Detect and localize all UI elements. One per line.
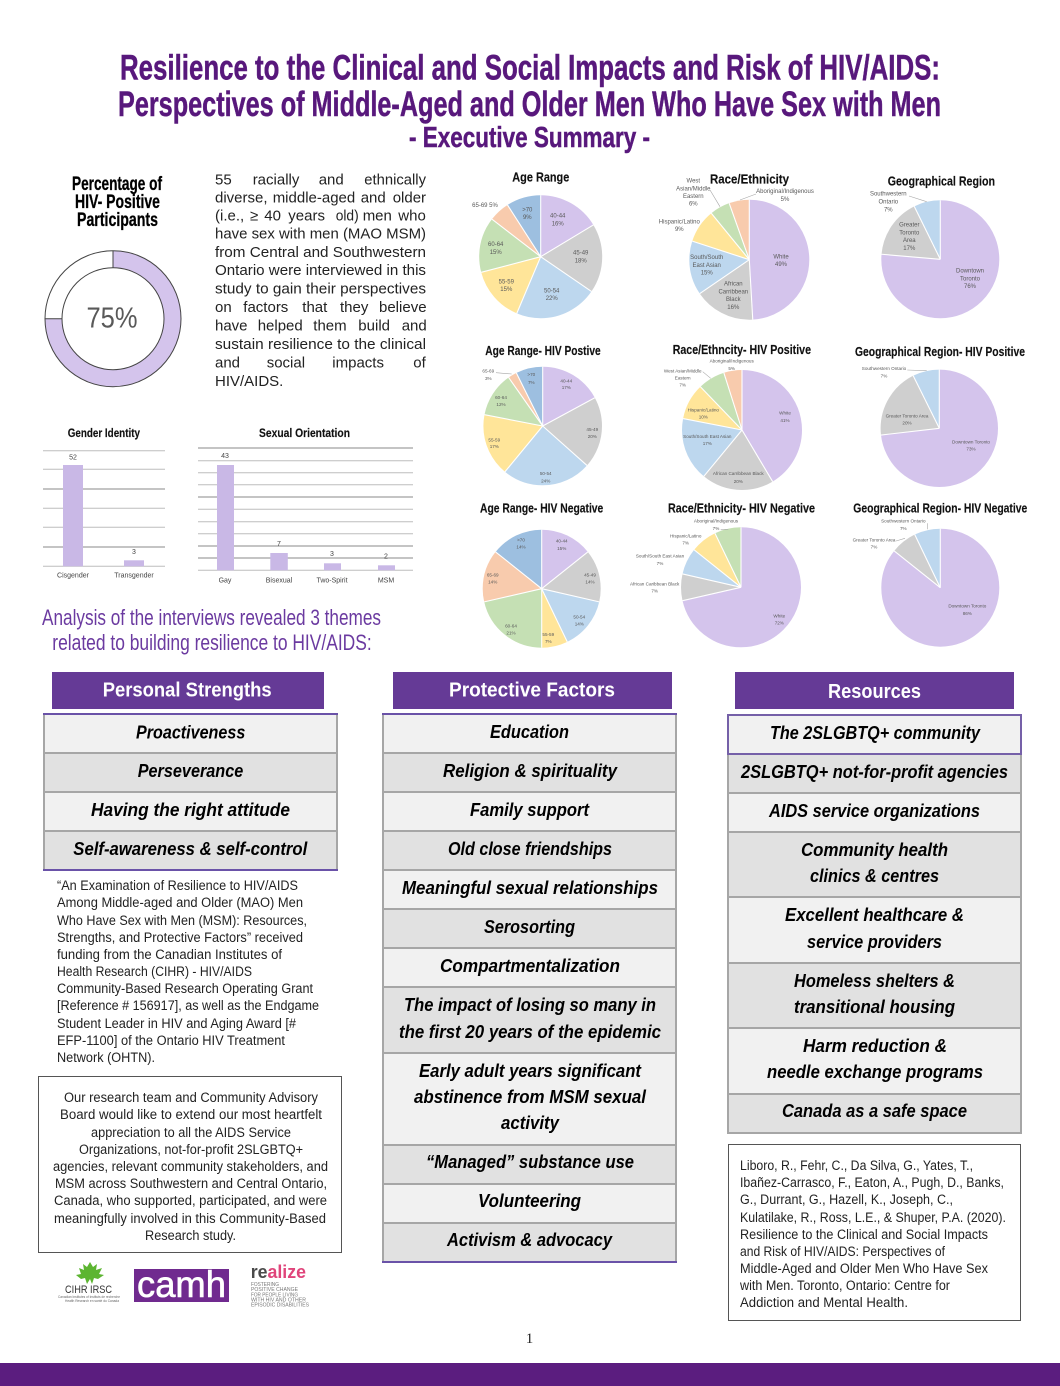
text block: study description: from Central and Southwestern	[215, 244, 426, 261]
row: community health clinics: Community health	[801, 840, 948, 860]
row: self-awareness	[44, 831, 337, 870]
logo: CIHR IRSC	[58, 1262, 120, 1303]
row: managed substance use	[383, 1145, 676, 1184]
row: proactiveness: Proactiveness	[136, 722, 245, 742]
donut chart: 75%	[45, 251, 181, 387]
pie chart: geographical region HIV positive: 73%	[966, 446, 976, 452]
pie chart: age range HIV positive: 7%	[528, 380, 535, 385]
pie chart: age range: 55-59	[499, 279, 515, 285]
row: self-awareness: Self-awareness & self-control	[73, 839, 308, 859]
panel: resources	[728, 672, 1021, 1133]
pie chart: race/ethnicity	[659, 171, 814, 320]
row: early adult years abstinence: abstinence from MSM sexual	[414, 1087, 647, 1107]
callout: acknowledgement box: appreciation to all the AIDS Service	[91, 1125, 291, 1140]
row: meaningful sexual relationships: Meaningful sexual relationships	[402, 878, 658, 898]
text block: citation box: and Risk of HIV/AIDS: Perspectives of	[740, 1244, 945, 1259]
callout: acknowledgement box: Organizations, not-for-profit 2SLGBTQ+	[79, 1142, 303, 1157]
row: compartmentalization: Compartmentalization	[440, 956, 620, 976]
row: family support: Family support	[470, 800, 590, 820]
row: compartmentalization	[383, 948, 676, 987]
pie chart: age range HIV positive: 17%	[562, 385, 571, 390]
row: early adult years abstinence: activity	[501, 1113, 560, 1133]
pie chart: race/ethnicity: Carribbean	[718, 290, 748, 296]
pie chart: age range: 18%	[575, 259, 587, 265]
pie chart: race/ethnicity HIV positive: African Carribbean Black	[713, 471, 764, 476]
text block: study description: and	[402, 318, 427, 335]
footer bar	[0, 1363, 1060, 1386]
pie chart: age range HIV positive: 60-64	[495, 395, 507, 400]
pie chart: age range HIV negative: 7%	[545, 639, 552, 644]
row: activism and advocacy	[383, 1223, 676, 1262]
pie chart: geographical region HIV negative: 86%	[963, 611, 972, 616]
pie chart: age range HIV positive: 65-69	[482, 369, 495, 374]
text block: study description: have sex with men (MAO MSM)	[215, 225, 426, 242]
pie chart: race/ethnicity HIV negative: 7%	[682, 540, 689, 546]
pie chart: race/ethnicity: 9%	[675, 227, 684, 233]
pie chart: age range HIV positive: 17%	[490, 444, 499, 449]
heading: percentage of HIV-positive participants: Participants	[77, 210, 158, 231]
pie chart: age range: 65-69 5%	[472, 203, 499, 209]
text block: study description: helped	[258, 318, 303, 335]
text block: study description: and	[361, 189, 386, 206]
row: homeless shelters	[728, 963, 1021, 1028]
row: community health clinics: clinics & centres	[810, 866, 939, 886]
heading: analysis themes: Analysis of the interviews revealed 3 themes	[42, 605, 381, 630]
heading: analysis themes: related to building resilience to HIV/AIDS:	[52, 630, 372, 655]
text block: citation box: Middle-Aged and Older Men Who Have Sex	[740, 1261, 988, 1276]
text block: study description: old)	[336, 208, 359, 225]
row: homeless shelters: transitional housing	[794, 997, 955, 1017]
callout: acknowledgement box: agencies, relevant community stakeholders, and	[53, 1159, 328, 1174]
pie chart: age range HIV negative: 14%	[516, 544, 526, 550]
row: community health clinics	[728, 832, 1021, 897]
bar chart: sexual orientation: 43	[221, 453, 229, 460]
header: protective factors	[393, 672, 672, 709]
pie chart: race/ethnicity: 16%	[727, 305, 740, 311]
title: - Executive Summary -	[409, 122, 650, 154]
text block: funding statement: Community-Based Research Operating Grant	[57, 981, 313, 996]
pie chart: race/ethnicity HIV negative: South/South East Asian	[636, 554, 685, 559]
text block: study description: middle-aged	[273, 189, 355, 206]
text block: funding statement: funding from the Canadian Institutes of	[57, 947, 282, 962]
pie chart: race/ethnicity HIV positive: 17%	[703, 441, 712, 446]
row: the 2SLGBTQ+ community	[728, 715, 1021, 754]
text block: study description: HIV/AIDS.	[215, 373, 283, 390]
row: impact of losing so many	[383, 987, 676, 1053]
pie chart: age range: 15%	[490, 250, 502, 256]
pie chart: age range HIV positive: 40-44	[560, 378, 573, 383]
pie chart: age range HIV positive: 12%	[496, 402, 506, 407]
bar chart: gender identity: 52	[69, 454, 77, 462]
pie chart: race/ethnicity HIV negative: 7%	[713, 526, 719, 531]
row: serosorting: Serosorting	[484, 917, 575, 937]
text block: study description: on	[215, 299, 232, 316]
pie chart: race/ethnicity HIV positive: 20%	[734, 479, 743, 484]
pie chart: race/ethnicity HIV positive	[664, 342, 811, 484]
text block: citation box: Liboro, R., Fehr, C., Da Silva, G., Yates, T.,	[740, 1158, 973, 1173]
pie chart: race/ethnicity HIV positive: 5%	[728, 366, 735, 371]
row: AIDS service organizations	[728, 793, 1021, 832]
row: volunteering	[383, 1184, 676, 1223]
row: homeless shelters: Homeless shelters &	[794, 971, 955, 991]
pie chart: age range HIV negative: 14%	[585, 580, 595, 584]
row: impact of losing so many: The impact of losing so many in	[404, 995, 656, 1015]
bar chart: sexual orientation: Bisexual	[266, 578, 293, 584]
header: personal strengths	[52, 672, 324, 709]
row: having the right attitude	[44, 792, 337, 831]
pie chart: geographical region HIV negative: Greater Toronto Area	[853, 537, 896, 542]
row: religion	[383, 753, 676, 792]
row: Canada as a safe space: Canada as a safe space	[782, 1101, 967, 1121]
text block: funding statement: EFP-1100] of the Ontario HIV Treatment	[57, 1033, 285, 1048]
text block: study description: (i.e.,	[215, 208, 244, 225]
text block: funding statement	[57, 878, 319, 1065]
pie chart: age range HIV positive: Age Range- HIV Postive	[485, 343, 601, 358]
pie chart: age range HIV positive	[482, 343, 601, 484]
pie chart: age range HIV negative	[480, 501, 603, 648]
pie chart: race/ethnicity: Aboriginal/Indigenous	[756, 189, 814, 195]
pie chart: race/ethnicity HIV positive: Race/Ethncity- HIV Positive	[673, 342, 811, 357]
callout: acknowledgement box: Research study.	[145, 1228, 236, 1243]
pie chart: geographical region: 76%	[964, 284, 977, 290]
pie chart: geographical region HIV positive	[855, 344, 1025, 458]
row: meaningful sexual relationships	[383, 870, 676, 909]
text block: funding statement: Network (OHTN).	[57, 1050, 155, 1065]
pie chart: race/ethnicity: 6%	[689, 202, 698, 208]
text block: study description: social	[267, 355, 305, 372]
pie chart: geographical region: Ontario	[878, 200, 899, 206]
pie chart: race/ethnicity: African	[724, 282, 743, 288]
pie chart: race/ethnicity HIV negative: Hispanic/Latino	[670, 533, 702, 538]
pie chart: race/ethnicity HIV positive: 7%	[679, 382, 686, 388]
pie chart: age range: 45-49	[573, 251, 589, 257]
callout: acknowledgement box	[38, 1076, 342, 1252]
header: protective factors: Protective Factors	[449, 680, 615, 702]
pie chart: race/ethnicity HIV positive: Eastern	[675, 376, 691, 380]
pie chart: race/ethnicity HIV negative: 7%	[657, 561, 663, 566]
text block: study description: 40	[264, 208, 281, 225]
pie chart: age range: 50-54	[544, 288, 560, 294]
text block: study description: them	[313, 318, 347, 335]
pie chart: race/ethnicity: Eastern	[683, 194, 704, 200]
title	[118, 48, 941, 154]
pie chart: race/ethnicity: West	[687, 179, 700, 185]
logo: realize	[251, 1262, 309, 1309]
pie chart: geographical region: Geographical Region	[888, 174, 995, 189]
pie chart: age range HIV negative: 50-54	[573, 615, 586, 620]
pie chart: geographical region HIV positive: 7%	[881, 374, 887, 379]
text block: study description: study to gain their perspectives	[215, 281, 426, 298]
text block: citation box: with Men. Toronto, Ontario: Centre for	[739, 1278, 950, 1293]
logo: realize: POSITIVE CHANGE	[251, 1287, 298, 1293]
pie chart: age range HIV negative: 15%	[557, 546, 566, 551]
logo: camh: camh	[137, 1264, 226, 1305]
logo: realize: FOR PEOPLE LIVING	[251, 1292, 298, 1298]
row: activism and advocacy: Activism & advocacy	[446, 1230, 613, 1250]
pie chart: age range HIV positive: 45-49	[586, 427, 599, 432]
pie chart: age range HIV positive: 50-54	[540, 471, 552, 476]
text block: study description: men	[363, 208, 392, 225]
logo: realize: FOSTERING	[251, 1282, 279, 1288]
page number: 1	[526, 1331, 533, 1347]
text block: study description: build	[358, 318, 390, 335]
text block: funding statement: Who Have Sex with Men (MSM): Resources,	[57, 913, 307, 928]
pie chart: race/ethnicity HIV positive: West Asian/Middle	[664, 369, 702, 374]
pie chart: race/ethnicity HIV positive: 10%	[699, 414, 708, 420]
pie chart: geographical region: 17%	[903, 246, 916, 252]
pie chart: age range: Age Range	[512, 170, 569, 185]
pie chart: geographical region HIV negative	[853, 501, 1027, 617]
text block: study description: 55	[215, 171, 232, 188]
pie chart: geographical region HIV positive: Greater Toronto Area	[886, 413, 929, 418]
row: the 2SLGBTQ+ community: The 2SLGBTQ+ community	[770, 723, 981, 743]
bar chart: gender identity: Gender Identity	[68, 428, 141, 440]
header: personal strengths: Personal Strengths	[103, 680, 272, 702]
pie chart: age range HIV negative: 14%	[488, 580, 497, 584]
pie chart: geographical region HIV positive: Downtown Toronto	[952, 440, 990, 445]
row: perseverance	[44, 753, 337, 792]
text block: citation box: Resilience to the Clinical and Social Impacts	[740, 1227, 988, 1242]
row: early adult years abstinence: Early adult years significant	[419, 1061, 642, 1081]
text block: study description: sustain resilience to the clinical	[215, 336, 426, 353]
row: 2SLGBTQ+ not-for-profit agencies	[728, 754, 1021, 793]
text block: study description: have	[215, 318, 248, 335]
text block: study description: they	[340, 299, 369, 316]
row: Canada as a safe space	[728, 1094, 1021, 1133]
text block: study description: ethnically	[364, 171, 426, 188]
text block: study description: impacts	[332, 355, 384, 372]
callout: acknowledgement box: Board would like to extend our most heartfelt	[60, 1107, 322, 1122]
pie chart: age range HIV negative: 21%	[506, 630, 516, 636]
pie chart: geographical region HIV negative: Southwestern Ontario	[881, 519, 926, 524]
row: excellent healthcare	[728, 897, 1021, 963]
pie chart: age range: 22%	[546, 296, 558, 302]
row: education: Education	[490, 722, 569, 742]
row: serosorting	[383, 909, 676, 948]
row: harm reduction: needle exchange programs	[767, 1062, 983, 1082]
text block: citation box: Kulatilake, R., Ross, L.E., & Shuper, P.A. (2020).	[740, 1210, 1006, 1225]
pie chart: geographical region: Downtown	[956, 269, 984, 275]
pie chart: geographical region HIV positive: Southwestern Ontario	[862, 366, 907, 371]
pie chart: race/ethnicity: Asian/Middle	[676, 186, 711, 192]
bar chart: sexual orientation	[198, 428, 413, 584]
heading: percentage of HIV-positive participants: HIV- Positive	[75, 192, 160, 213]
pie chart: race/ethnicity HIV negative: Aboriginal/Indigenous	[694, 518, 739, 523]
pie chart: race/ethnicity HIV positive: Aboriginal/Indigenous	[710, 359, 754, 364]
text block: study description: ≥	[250, 208, 258, 225]
pie chart: race/ethnicity HIV negative: Race/Ethnicity- HIV Negative	[668, 500, 815, 515]
row: AIDS service organizations: AIDS service organizations	[768, 801, 980, 821]
callout: acknowledgement box: MSM across Southwestern and Central Ontario,	[55, 1176, 327, 1191]
row: religion: Religion & spirituality	[443, 761, 618, 781]
bar chart: sexual orientation: MSM	[378, 578, 394, 584]
panel: personal strengths	[43, 672, 338, 870]
pie chart: race/ethnicity: South/South	[690, 255, 723, 261]
pie chart: geographical region: Area	[903, 238, 916, 244]
text block: funding statement: Among Middle-aged and Older (MAO) Men	[57, 895, 303, 910]
row: impact of losing so many: the first 20 years of the epidemic	[399, 1022, 661, 1042]
pie chart: race/ethnicity HIV negative	[630, 500, 815, 626]
row: harm reduction: Harm reduction &	[803, 1036, 947, 1056]
text block: study description: of	[413, 355, 427, 372]
pie chart: race/ethnicity HIV positive: 41%	[780, 418, 790, 423]
pie chart: race/ethnicity HIV positive: South/South East Asian	[683, 434, 732, 439]
pie chart: geographical region: Southwestern	[870, 192, 907, 198]
row: 2SLGBTQ+ not-for-profit agencies: 2SLGBTQ+ not-for-profit agencies	[740, 762, 1008, 782]
callout: acknowledgement box: meaningfully involved in this Community-Based	[54, 1211, 326, 1226]
bar chart: gender identity: 3	[132, 549, 136, 556]
bar chart: gender identity: Cisgender	[57, 572, 90, 580]
pie chart: age range HIV positive: 24%	[541, 479, 550, 484]
pie chart: age range HIV negative: 14%	[575, 622, 584, 626]
pie chart: age range HIV negative: 65-69	[487, 573, 499, 578]
pie chart: age range HIV positive: >70	[527, 372, 536, 377]
pie chart: geographical region	[870, 174, 995, 290]
pie chart: age range: 15%	[500, 287, 513, 293]
pie chart: age range HIV positive: 3%	[485, 376, 492, 381]
text block: study description: that	[302, 299, 328, 316]
bar chart: sexual orientation: 7	[277, 541, 281, 548]
text block: citation box: Addiction and Mental Health.	[740, 1295, 908, 1310]
pie chart: age range: >70	[522, 207, 533, 213]
header: resources: Resources	[828, 681, 921, 703]
text block: study description: factors	[243, 299, 288, 316]
heading: percentage of HIV-positive participants: Percentage of	[72, 174, 162, 195]
logo: CIHR IRSC: CIHR IRSC	[65, 1284, 112, 1296]
logo: CIHR IRSC: Canadian Institutes of Instituts de recherche	[58, 1295, 120, 1299]
pie chart: age range: 40-44	[550, 214, 566, 220]
callout: acknowledgement box: Our research team and Community Advisory	[64, 1090, 318, 1105]
pie chart: age range HIV negative: 45-49	[584, 573, 596, 578]
heading: analysis themes	[42, 605, 381, 655]
pie chart: race/ethnicity: East Asian	[693, 263, 721, 269]
pie chart: age range HIV positive: 55-59	[488, 437, 501, 442]
pie chart: age range HIV negative: Age Range- HIV Negative	[480, 501, 603, 516]
pie chart: race/ethnicity: Black	[726, 297, 742, 303]
bar chart: sexual orientation: Two-Spirit	[316, 578, 348, 584]
pie chart: geographical region: 7%	[884, 207, 893, 213]
header: resources	[735, 672, 1014, 709]
text block: citation box: G., Durrant, G., Hazell, K., Joseph, C.,	[740, 1192, 953, 1207]
row: excellent healthcare: Excellent healthcare &	[785, 905, 964, 925]
pie chart: race/ethnicity: 49%	[775, 262, 788, 268]
bar chart: sexual orientation: Sexual Orientation	[259, 428, 350, 440]
text block: study description: and	[319, 171, 344, 188]
pie chart: race/ethnicity: 5%	[781, 197, 790, 203]
pie chart: geographical region: Toronto	[960, 276, 981, 282]
row: old close friendships: Old close friendships	[448, 839, 612, 859]
pie chart: race/ethnicity: Hispanic/Latino	[659, 219, 700, 225]
pie chart: race/ethnicity HIV negative: 7%	[651, 588, 658, 594]
pie chart: age range HIV negative: 60-64	[505, 623, 517, 628]
pie chart: age range HIV negative: 40-44	[556, 539, 568, 544]
pie chart: race/ethnicity HIV negative: 72%	[775, 620, 784, 626]
text block: study description: who	[397, 208, 426, 225]
pie chart: age range: 60-64	[488, 242, 504, 248]
pie chart: geographical region: Greater	[899, 223, 919, 229]
row: old close friendships	[383, 831, 676, 870]
logo: realize: WITH HIV AND OTHER	[251, 1298, 306, 1304]
pie chart: race/ethnicity HIV negative: White	[773, 613, 786, 618]
pie chart: race/ethnicity HIV positive: White	[779, 411, 791, 416]
bar chart: sexual orientation: 3	[330, 551, 334, 558]
bar chart: sexual orientation: 2	[384, 554, 388, 561]
pie chart: race/ethnicity HIV positive: Hispanic/Latino	[688, 408, 719, 413]
row: education	[383, 714, 676, 753]
logo: CIHR IRSC: Health Research en santé du Canada	[65, 1299, 119, 1303]
row: proactiveness	[44, 714, 337, 753]
pie chart: geographical region HIV negative: Downtown Toronto	[948, 604, 987, 609]
row: perseverance: Perseverance	[138, 761, 243, 781]
pie chart: geographical region HIV positive: 20%	[902, 421, 912, 426]
row: having the right attitude: Having the right attitude	[91, 800, 290, 820]
pie chart: geographical region: Toronto	[899, 230, 920, 236]
logo: realize: realize	[251, 1262, 306, 1282]
pie chart: race/ethnicity: White	[773, 254, 789, 260]
pie chart: age range: 9%	[523, 215, 532, 221]
text block: funding statement: Student Leader in HIV and Aging Award [#	[57, 1016, 296, 1031]
bar chart: sexual orientation: Gay	[219, 578, 232, 584]
pie chart: age range HIV negative: 55-59	[542, 632, 555, 637]
heading: percentage of HIV-positive participants	[72, 174, 162, 231]
text block: study description: believe	[379, 299, 427, 316]
text block: study description: and	[215, 355, 240, 372]
text block: study description: Ontario were interviewed in this	[215, 262, 426, 279]
row: volunteering: Volunteering	[478, 1191, 581, 1211]
pie chart: race/ethnicity: Race/Ethnicity	[710, 171, 790, 186]
pie chart: age range: 16%	[552, 222, 564, 228]
text block: study description: years	[288, 208, 325, 225]
text block: funding statement: “An Examination of Resilience to HIV/AIDS	[57, 878, 298, 893]
pie chart: age range HIV positive: 20%	[588, 434, 597, 439]
pie chart: geographical region HIV negative: 7%	[900, 526, 907, 531]
pie chart: race/ethnicity: 15%	[701, 271, 713, 277]
logo: realize: EPISODIC DISABILITIES	[251, 1303, 309, 1309]
pie chart: race/ethnicity HIV negative: African Caribbean Black	[630, 582, 680, 587]
text block: study description: racially	[253, 171, 300, 188]
text block: citation box	[728, 1144, 1020, 1320]
row: early adult years abstinence	[383, 1053, 676, 1145]
donut chart: 75%: 75%	[86, 302, 138, 334]
panel: protective factors	[382, 672, 677, 1262]
pie chart: age range	[472, 170, 593, 313]
text block: study description: diverse,	[215, 189, 268, 206]
pie chart: geographical region HIV negative: 7%	[871, 545, 877, 550]
row: family support	[383, 792, 676, 831]
text block: funding statement: Health Research (CIHR) - HIV/AIDS	[57, 964, 252, 979]
callout: acknowledgement box: Canada, who supported, participated, and were	[54, 1193, 327, 1208]
text block: study description: older	[393, 189, 426, 206]
row: harm reduction	[728, 1028, 1021, 1094]
row: managed substance use: “Managed” substance use	[426, 1152, 634, 1172]
row: excellent healthcare: service providers	[807, 932, 942, 952]
bar chart: gender identity	[43, 428, 165, 580]
pie chart: age range HIV negative: >70	[517, 537, 525, 542]
bar chart: gender identity: Transgender	[114, 572, 154, 580]
text block: citation box: Ibañez-Carrasco, F., Eaton, A., Pugh, D., Banks,	[740, 1175, 1004, 1190]
text block: funding statement: Strengths, and Protective Factors” received	[57, 930, 303, 945]
text block: funding statement: [Reference # 156917], as well as the Endgame	[57, 998, 319, 1013]
